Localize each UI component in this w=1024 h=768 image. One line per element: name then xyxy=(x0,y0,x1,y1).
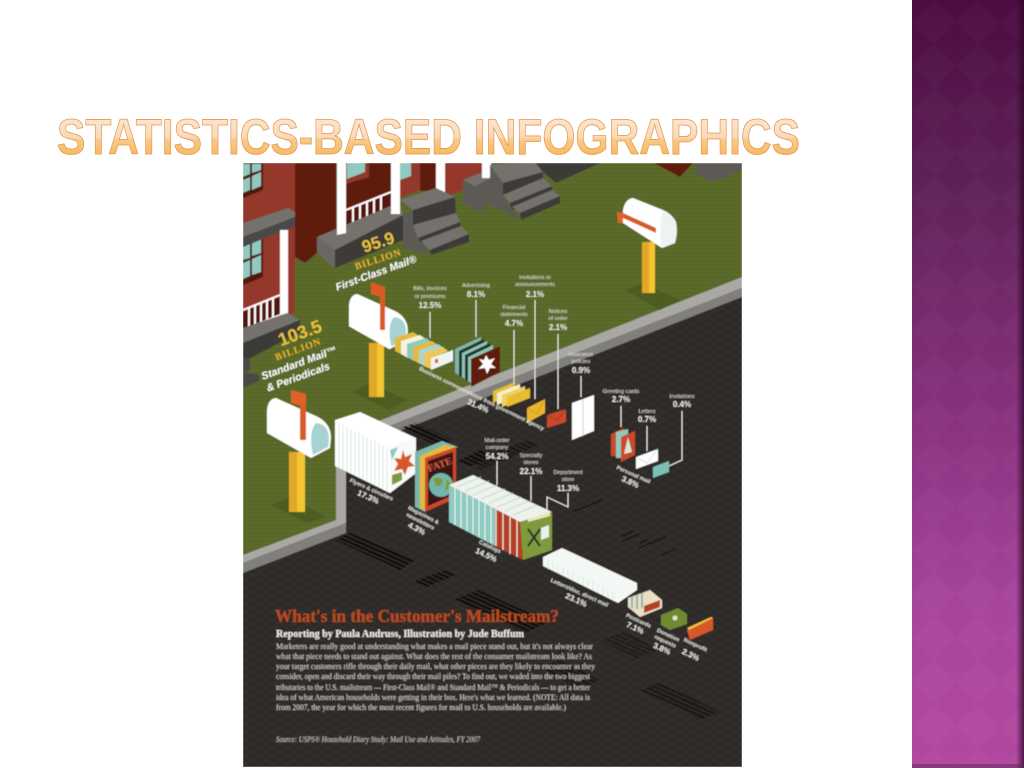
label: insurance policies: 0.9% xyxy=(572,366,590,375)
leader lines xyxy=(430,300,682,510)
label: catalogs xyxy=(473,540,502,564)
label: notices of order: Notices xyxy=(549,309,568,315)
label: financial statements xyxy=(500,305,528,328)
label: insurance policies: Insurance xyxy=(569,352,593,358)
label: department store xyxy=(553,470,583,493)
label: invitations or announcements: announcements xyxy=(515,282,555,288)
mail pieces: greeting cards xyxy=(611,428,635,462)
label: nonprofit: 2.3% xyxy=(681,647,701,663)
label: bills: or premiums xyxy=(414,294,446,300)
label: personal mail: 3.8% xyxy=(620,474,640,490)
label: mail-order company: 54.2% xyxy=(486,452,508,461)
label: invitations or announcements: Invitations or xyxy=(519,275,551,281)
label: magazines and newsletters xyxy=(399,505,440,540)
volume: standard mail and periodicals: BILLION xyxy=(274,336,323,363)
label: business or government agency: Business correspondence from government agency xyxy=(418,366,546,433)
label: department store: 11.3% xyxy=(557,484,579,493)
road xyxy=(243,276,742,767)
mail pieces: bills xyxy=(395,332,453,370)
label: specialty stores: stores xyxy=(523,460,539,466)
mail pieces: donation requests xyxy=(661,608,687,630)
label: flyers and circulars: Flyers & circulars xyxy=(349,478,394,503)
label: invitations: 0.4% xyxy=(673,400,691,409)
mail pieces: postcards xyxy=(628,590,662,617)
label: bills: 12.5% xyxy=(419,301,441,310)
label: bills: Bills, invoices xyxy=(413,286,447,292)
label: letters: 0.7% xyxy=(638,415,656,424)
label: nonprofit: Nonprofit xyxy=(682,637,708,654)
volume: standard mail and periodicals: 103.5 xyxy=(275,316,325,350)
label: mail-order company: Mail-order xyxy=(484,438,510,444)
text block: introduction: Marketers are really good at understanding what makes a mail piece stand out, but it's not always clear xyxy=(276,642,593,651)
source note: Source: USPS® Household Diary Study: Mail Use and Attitudes, FY 2007 xyxy=(276,735,481,744)
label: flyers and circulars xyxy=(345,478,394,511)
mail pieces: flyers and circulars xyxy=(335,412,416,493)
label: notices of order xyxy=(548,309,568,332)
volume: standard mail and periodicals: Standard Mail™ xyxy=(260,344,339,383)
label: advertising: Advertising xyxy=(462,283,490,289)
text block: introduction: consider, open and discard their way through their mail piles? To find out, we waded into the two biggest xyxy=(276,672,591,681)
icon: mailbox lower xyxy=(267,390,331,523)
mail pieces: magazines xyxy=(415,441,458,512)
label: mail-order company: company xyxy=(486,445,509,451)
mail pieces: financial statements xyxy=(493,382,530,407)
mail pieces: advertising xyxy=(455,337,500,387)
volume: first-class mail: BILLION xyxy=(354,247,403,273)
label: donation requests: Donation xyxy=(656,628,681,644)
label: financial statements: Financial xyxy=(503,305,525,311)
text block: introduction: what that piece needs to stand out against. What does the rest of the consumer mailstream look like? As xyxy=(276,652,592,661)
volume: first-class mail xyxy=(335,232,418,292)
label: department store: store xyxy=(562,477,574,483)
icon: mailbox top right xyxy=(617,198,680,310)
label: mail-order company xyxy=(484,438,510,461)
label: financial statements: statements xyxy=(500,312,528,318)
mail pieces: magazines: FATE xyxy=(426,456,454,475)
mail pieces: catalogs xyxy=(449,475,552,560)
label: advertising xyxy=(462,283,490,299)
volume: standard mail and periodicals: & Periodicals xyxy=(265,360,332,394)
label: personal mail: Personal mail xyxy=(615,465,651,486)
label: postcards xyxy=(621,613,652,638)
label: donation requests: 3.8% xyxy=(652,641,672,657)
mail pieces: nonprofit xyxy=(687,617,713,640)
text block: introduction xyxy=(276,642,596,712)
label: invitations or announcements: 2.1% xyxy=(526,290,544,299)
label: flyers and circulars: 17.3% xyxy=(356,488,380,506)
label: department store: Department xyxy=(553,470,583,476)
label: postcards: Postcards xyxy=(625,613,652,630)
label: letters and direct mail: Letters/disc. direct mail xyxy=(549,578,609,609)
lawn xyxy=(243,163,742,555)
label: invitations xyxy=(669,394,695,409)
mail pieces: personal invitations xyxy=(653,461,669,478)
label: notices of order: 2.1% xyxy=(549,323,567,332)
label: bills xyxy=(413,286,447,310)
mail pieces: invitations or announcements xyxy=(527,399,545,423)
mail pieces: insurance policies xyxy=(572,395,594,440)
sidebar: purple gradient band xyxy=(912,0,1024,768)
label: magazines and newsletters: 4.3% xyxy=(406,521,427,537)
text block: introduction: from 2007, the year for which the most recent figures for mail to U.S. households are available.) xyxy=(276,703,566,712)
label: greeting cards xyxy=(603,389,640,404)
label: magazines and newsletters: Magazines & xyxy=(407,505,440,526)
text block: introduction: idea of what American households were getting in their box. Here's what we learned. (NOTE: All data is xyxy=(276,693,590,702)
label: magazines and newsletters: newsletters xyxy=(405,512,435,532)
neighbouring porch and stairs xyxy=(463,163,742,220)
label: invitations or announcements xyxy=(515,275,555,299)
label: business or government agency: 31.4% xyxy=(466,397,490,415)
label: insurance policies xyxy=(569,352,593,375)
text block: introduction: your target customers rifle through their daily mail, what other pieces are they likely to encounter as they xyxy=(276,662,596,671)
label: notices of order: of order xyxy=(548,316,568,322)
text block: introduction: tributaries to the U.S. mailstream — First-Class Mail® and Standard Mail™ & Periodicals — to get a better xyxy=(276,683,590,692)
label: catalogs: Catalogs xyxy=(478,540,502,555)
label: donation requests xyxy=(649,628,681,658)
mail pieces: letters and direct mail xyxy=(543,548,637,603)
center house xyxy=(295,163,483,268)
heading: what's in the customer's mailstream: What's in the Customer's Mailstream? xyxy=(275,606,559,626)
label: donation requests: requests xyxy=(653,634,677,650)
road shadow stripes xyxy=(335,423,720,720)
label: invitations: Invitations xyxy=(669,394,695,400)
volume: first-class mail: First-Class Mail® xyxy=(334,253,419,294)
label: postcards: 7.1% xyxy=(625,620,645,636)
label: specialty stores: 22.1% xyxy=(520,467,542,476)
left house xyxy=(243,163,300,388)
label: financial statements: 4.7% xyxy=(505,319,523,328)
label: letters xyxy=(638,409,656,424)
label: greeting cards: Greeting cards xyxy=(603,389,640,395)
sidewalk xyxy=(243,277,742,573)
label: personal mail xyxy=(612,465,651,494)
label: letters: Letters xyxy=(638,409,656,415)
mail pieces: notices of order xyxy=(547,409,566,428)
byline: Reporting by Paula Andruss, Illustration by Jude Buffum xyxy=(276,629,525,640)
label: nonprofit xyxy=(677,637,708,664)
label: catalogs: 14.5% xyxy=(474,546,498,564)
mail pieces: personal letters xyxy=(636,449,658,469)
label: insurance policies: policies xyxy=(572,359,591,365)
label: letters and direct mail: 23.1% xyxy=(564,591,588,609)
label: specialty stores: Specialty xyxy=(520,453,543,459)
label: greeting cards: 2.7% xyxy=(612,395,630,404)
icon: mailbox middle xyxy=(349,282,408,410)
label: specialty stores xyxy=(520,453,543,476)
volume: standard mail and periodicals xyxy=(261,319,336,392)
label: advertising: 8.1% xyxy=(467,290,485,299)
infographic: customer's mailstream xyxy=(243,163,742,767)
volume: first-class mail: 95.9 xyxy=(359,228,397,257)
title: STATISTICS-BASED INFOGRAPHICS xyxy=(57,109,800,165)
